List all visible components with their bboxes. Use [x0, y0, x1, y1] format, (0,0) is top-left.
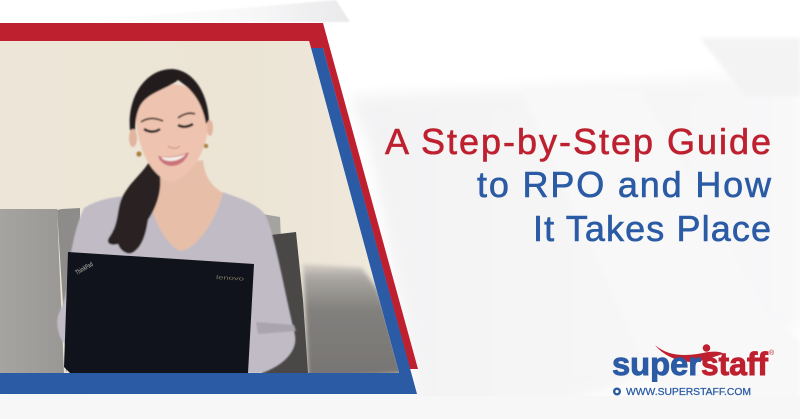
- logo wordmark red: staff: [701, 346, 768, 382]
- mouth: [158, 152, 189, 166]
- logo: superstaff: [612, 344, 775, 382]
- title line 3: It Takes Place: [533, 208, 771, 249]
- hair: [130, 69, 209, 134]
- laptop: [64, 252, 254, 373]
- title: A Step-by-Step Guide: [385, 121, 771, 162]
- registered mark: ®: [769, 349, 775, 357]
- title line 2: to RPO and How: [477, 164, 772, 205]
- ear right: [207, 120, 213, 136]
- sofa back cushion: [57, 208, 80, 373]
- logo wordmark blue: super: [612, 346, 701, 382]
- blue frame: [0, 48, 417, 394]
- earrings: [136, 151, 142, 157]
- url: WWW.SUPERSTAFF.COM: [626, 387, 751, 398]
- red frame: [0, 23, 418, 369]
- neck and chest: [150, 160, 223, 251]
- logo swoosh: [655, 345, 724, 362]
- globe icon: [613, 388, 621, 396]
- logo dot: [703, 344, 710, 352]
- laptop brand: lenovo: [216, 275, 244, 282]
- photo: woman with laptop on sofa: [0, 41, 420, 380]
- sofa right: [301, 263, 399, 373]
- ponytail: [108, 160, 160, 253]
- face: [136, 84, 208, 182]
- laptop logo: ThinkPad: [74, 261, 94, 277]
- sofa left cushion: [0, 209, 64, 373]
- sweater: [57, 192, 295, 373]
- ear left: [129, 129, 137, 147]
- website: [613, 387, 751, 398]
- eyes: [144, 129, 160, 132]
- sofa back right: [264, 214, 281, 235]
- nose shade: [168, 146, 180, 148]
- brows: [141, 118, 163, 122]
- wall: [0, 41, 420, 376]
- sleeve shade: [256, 322, 296, 334]
- dark pillow: [262, 232, 308, 373]
- woman: [57, 69, 296, 373]
- title: [385, 121, 772, 249]
